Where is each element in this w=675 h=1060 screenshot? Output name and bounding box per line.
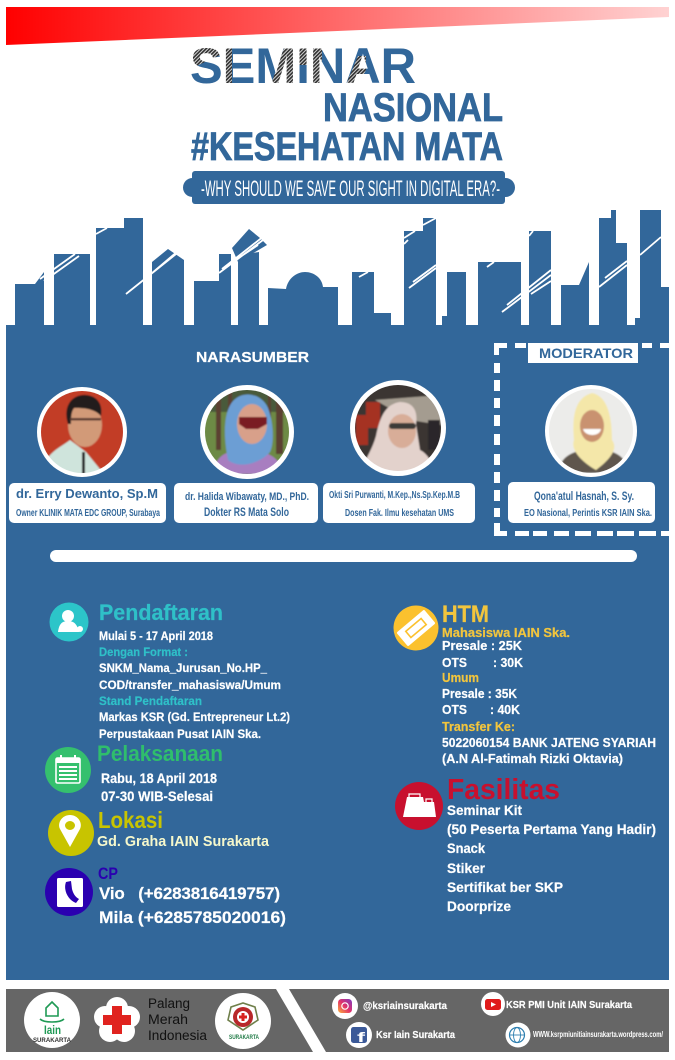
moderator dashed frame [494,343,670,536]
footer band [6,989,669,1052]
speaker photo: dr. Erry Dewanto [37,387,127,477]
speaker card: dr. Halida Wibawaty [174,483,318,523]
section: fasilitas: Snack [447,840,485,856]
speaker card: Okti Sri Purwanti [323,483,475,523]
section: HTM tickets: Presale : 35K [442,687,517,701]
speaker card: dr. Halida Wibawaty: Dokter RS Mata Solo [204,505,289,519]
tagline pill [183,171,515,204]
main blue panel [6,325,669,980]
section: fasilitas [395,774,656,914]
social: website [506,1022,663,1048]
moderator label [528,343,638,363]
moderator photo: Qona'atul Hasnah [545,385,637,477]
section: HTM tickets: HTM [442,601,489,628]
red gradient banner [6,7,669,45]
title line: #KESEHATAN MATA: #KESEHATAN MATA [191,125,503,169]
section: fasilitas: Fasilitas [447,774,560,806]
section: HTM tickets: : 30K [493,656,523,670]
icon: calendar [45,747,91,793]
text: Palang Merah Indonesia: Palang [148,996,190,1011]
section: fasilitas: Sertifikat ber SKP [447,879,563,895]
section: pelaksanaan [45,741,223,804]
section: fasilitas: Seminar Kit [447,802,522,818]
section: HTM tickets: Mahasiswa IAIN Ska. [442,626,570,640]
section: HTM tickets: : 40K [490,703,520,717]
section: pendaftaran: Stand Pendaftaran [99,694,202,708]
speaker card: dr. Halida Wibawaty: dr. Halida Wibawaty, MD., PhD. [185,491,309,503]
title line: SEMINAR: SEMINAR [190,38,416,94]
icon: location pin [48,810,94,856]
speaker photo: dr. Halida Wibawaty [200,385,294,479]
section: pendaftaran: Pendaftaran [99,600,223,625]
section: contact person: Mila (+6285785020016) [99,908,286,927]
city skyline [15,210,669,330]
section: pelaksanaan: 07-30 WIB-Selesai [101,788,213,804]
section: HTM tickets: 5022060154 BANK JATENG SYARIAH [442,736,656,750]
speaker card: dr. Erry Dewanto: dr. Erry Dewanto, Sp.M [16,486,158,501]
section: contact person: CP [98,864,118,883]
social: facebook [346,1022,455,1048]
section: pendaftaran: Dengan Format : [99,645,188,659]
moderator label: MODERATOR [539,345,633,361]
section: HTM tickets: (A.N Al-Fatimah Rizki Oktavia) [442,752,623,766]
section: lokasi: Gd. Graha IAIN Surakarta [97,833,270,850]
text: Palang Merah Indonesia [148,996,207,1043]
section: fasilitas: (50 Peserta Pertama Yang Hadir) [447,821,656,837]
icon: phone book [45,868,93,916]
speaker card: Okti Sri Purwanti: Dosen Fak. Ilmu kesehatan UMS [345,507,454,519]
section: pelaksanaan: Pelaksanaan [97,741,223,766]
heading: narasumber: NARASUMBER [196,349,309,366]
section: contact person [45,864,286,927]
logo: IAIN Surakarta: SURAKARTA [33,1037,71,1044]
text: Palang Merah Indonesia: Indonesia [148,1028,207,1043]
logo: KSR IAIN Surakarta [215,993,271,1049]
section: pendaftaran: Perpustakaan Pusat IAIN Ska. [99,727,261,741]
section: HTM tickets [394,601,656,766]
section: pendaftaran: Mulai 5 - 17 April 2018 [99,629,213,643]
logo: IAIN Surakarta: Iain [44,1023,61,1037]
text: Palang Merah Indonesia: Merah [148,1012,188,1027]
section: HTM tickets: OTS [442,656,467,670]
section: pendaftaran: Markas KSR (Gd. Entrepreneur Lt.2) [99,710,290,724]
section: pendaftaran: COD/transfer_mahasiswa/Umum [99,678,281,692]
section: fasilitas: Stiker [447,860,486,876]
social: facebook: f [357,1029,366,1045]
speaker card: dr. Erry Dewanto: Owner KLINIK MATA EDC GROUP, Surabaya [16,507,160,519]
social: youtube: KSR PMI Unit IAIN Surakarta [506,999,632,1011]
logo: IAIN Surakarta [24,992,80,1048]
icon: shopping bags [395,782,443,830]
logo: Palang Merah Indonesia flower and cross [94,997,140,1042]
section: lokasi [48,807,270,856]
white divider bar [50,550,637,562]
section: HTM tickets: Presale : 25K [442,639,522,653]
logo: KSR IAIN Surakarta: SURAKARTA [229,1035,260,1041]
section: HTM tickets: Umum [442,671,479,685]
social: youtube [481,992,632,1016]
icon: ticket [394,606,438,650]
social: instagram [332,993,447,1019]
social: facebook: Ksr Iain Surakarta [376,1029,455,1041]
section: fasilitas: Doorprize [447,898,511,914]
section: pendaftaran [50,600,290,741]
title line: NASIONAL: NASIONAL [323,86,503,130]
moderator card: Qona'atul Hasnah: Qona'atul Hasnah, S. Sy. [534,489,634,503]
moderator card: Qona'atul Hasnah [508,482,655,523]
social: instagram: @ksriainsurakarta [363,1000,447,1012]
speaker photo: Okti Sri Purwanti [350,380,446,476]
section: contact person: Vio (+6283816419757) [99,884,280,903]
section: HTM tickets: Transfer Ke: [442,720,515,734]
icon: person [50,602,88,642]
section: HTM tickets: OTS [442,703,467,717]
title [190,38,503,169]
section: pelaksanaan: Rabu, 18 April 2018 [101,770,217,786]
speaker card: dr. Erry Dewanto [9,483,166,523]
speaker card: Okti Sri Purwanti: Okti Sri Purwanti, M.Kep.,Ns.Sp.Kep.M.B [329,489,460,501]
section: lokasi: Lokasi [98,807,163,833]
section: pendaftaran: SNKM_Nama_Jurusan_No.HP_ [99,661,267,675]
